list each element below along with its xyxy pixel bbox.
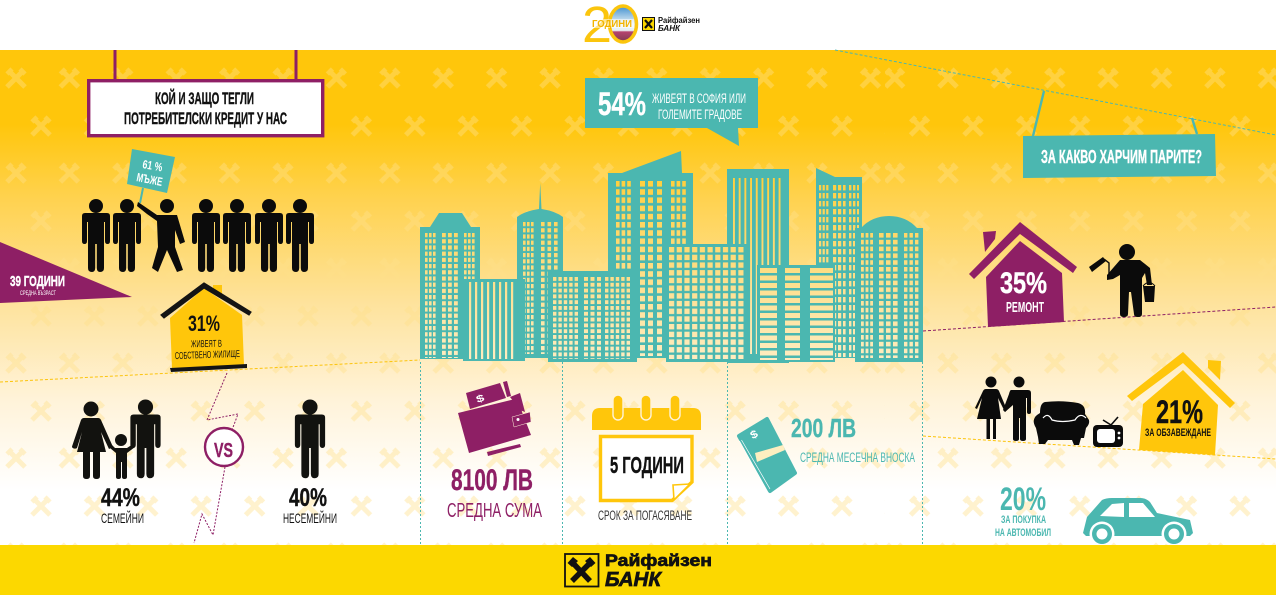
car icon [1083,498,1193,546]
monthly instalment: СРЕДНА МЕСЕЧНА ВНОСКА [800,450,915,465]
single stat: НЕСЕМЕЙНИ [283,509,337,526]
top logo: БАНК [658,24,681,33]
top logo [582,0,700,53]
protest sign: 61% men: 61 % [141,157,164,174]
wallet icon: $ [475,393,487,406]
footer logo wordmark: БАНК [605,569,663,591]
average age triangle [0,242,132,303]
family icon [72,399,161,479]
footer logo wordmark [605,551,712,591]
sofa icon [1034,401,1089,445]
heading sign: what do we spend on [1023,91,1216,178]
average amount: СРЕДНА СУМА [447,500,542,522]
house: 35% renovation: 35% [1000,267,1047,300]
footer logo wordmark: Райфайзен [605,551,712,570]
money stack icon [739,419,795,491]
average age triangle: СРЕДНА ВЪЗРАСТ [20,291,56,297]
house: 31% own home: 31% [188,311,220,336]
monthly instalment: 200 ЛВ [791,413,856,443]
painter icon [1089,244,1155,317]
callout: 54% big cities [585,78,758,146]
heading sign: who and why: ПОТРЕБИТЕЛСКИ КРЕДИТ У НАС [124,109,287,128]
single man icon [295,399,325,478]
repayment term: СРОК ЗА ПОГАСЯВАНЕ [598,508,692,523]
tv icon [1093,417,1123,447]
car stat [995,481,1051,539]
average age triangle: 39 ГОДИНИ [10,273,65,290]
vs badge [205,428,243,466]
house: 21% furnishing: ЗА ОБЗАВЕЖДАНЕ [1145,427,1211,439]
panel: what money is spent on [969,91,1235,546]
house: 31% own home: ЖИВЕЯТ В [191,339,222,350]
panel: who borrows [0,50,337,543]
heading sign: who and why [89,50,323,136]
family stat: СЕМЕЙНИ [101,509,144,526]
house: 35% renovation [969,222,1077,327]
average amount [447,464,542,522]
average amount: 8100 ЛВ [451,464,533,497]
top logo: ГОДИНИ [592,19,632,30]
heading sign: who and why: КОЙ И ЗАЩО ТЕГЛИ [155,89,254,108]
footer logo mark [565,554,598,586]
family stat [101,484,144,526]
single stat: 40% [289,484,327,512]
protest sign: 61% men [127,149,175,203]
monthly instalment [791,413,915,465]
house: 35% renovation: РЕМОНТ [1006,299,1044,316]
callout: 54% big cities: ГОЛЕМИТЕ ГРАДОВЕ [658,107,742,122]
couple icon [975,376,1031,441]
family stat: 44% [101,484,140,512]
city skyline [420,151,923,363]
car stat: 20% [1000,481,1046,517]
panel: loan figures [447,381,915,523]
calendar icon: 5 ГОДИНИ [610,452,684,478]
car stat: НА АВТОМОБИЛ [995,527,1051,539]
callout: 54% big cities: 54% [598,86,646,122]
wallet icon [458,381,531,456]
calendar icon [592,395,701,500]
house: 31% own home [161,283,251,372]
house: 21% furnishing: 21% [1156,394,1203,430]
lightning divider [194,373,238,543]
top logo: Райфайзен [658,16,700,25]
money stack icon: $ [748,428,760,442]
row of men icons [82,199,314,272]
vs badge: VS [214,440,233,462]
car stat: ЗА ПОКУПКА [1001,514,1046,526]
footer band with logo [0,545,1276,595]
house: 21% furnishing [1127,352,1235,455]
protest sign: 61% men: МЪЖЕ [135,170,164,189]
single stat [283,484,337,526]
house: 31% own home: СОБСТВЕНО ЖИЛИЩЕ [175,349,240,362]
callout: 54% big cities: ЖИВЕЯТ В СОФИЯ ИЛИ [652,91,746,106]
